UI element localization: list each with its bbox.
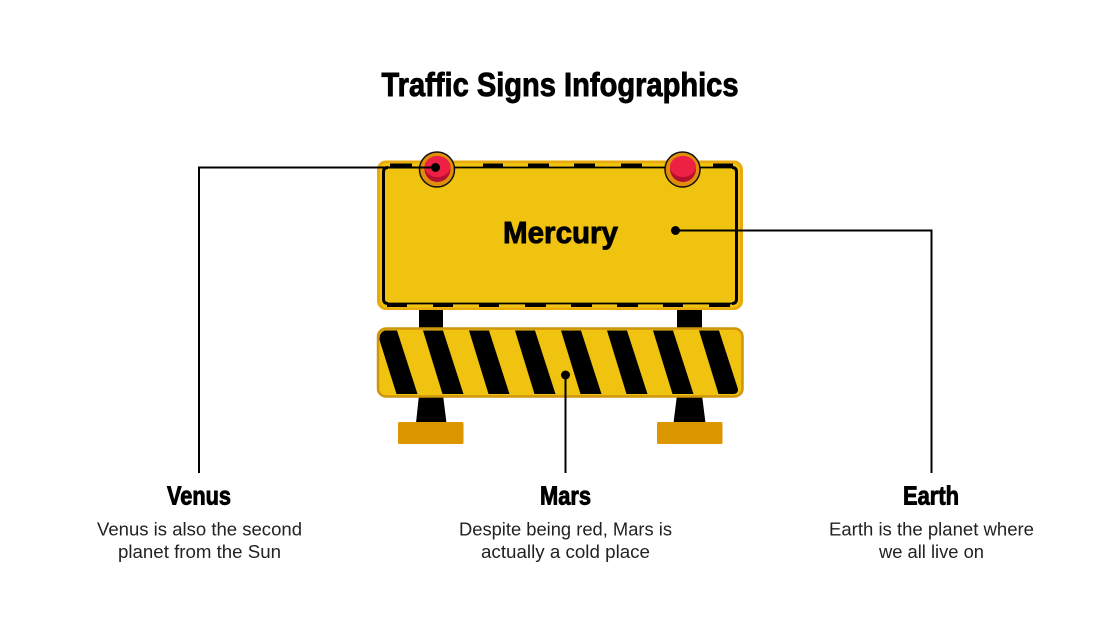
description: Earth: we all live on bbox=[878, 542, 984, 562]
description: Mars: Despite being red, Mars is bbox=[459, 520, 672, 540]
upper posts bbox=[419, 305, 702, 331]
warning light right bbox=[665, 152, 700, 187]
heading: Venus: Venus bbox=[167, 480, 231, 510]
sign label: Mercury: Mercury bbox=[503, 215, 619, 250]
connector: Mars bbox=[562, 372, 569, 473]
text block: Earth bbox=[829, 480, 1034, 562]
description: Mars: actually a cold place bbox=[481, 542, 650, 562]
text block: Mars bbox=[459, 480, 672, 562]
title: Traffic Signs Infographics bbox=[382, 67, 738, 104]
heading: Earth: Earth bbox=[903, 480, 959, 510]
warning light left bbox=[420, 152, 454, 187]
icon: road barrier sign bbox=[377, 152, 743, 444]
text block: Venus bbox=[97, 480, 302, 562]
sign board bbox=[377, 160, 743, 310]
description: Earth: Earth is the planet where bbox=[829, 520, 1034, 540]
lower legs bbox=[416, 395, 706, 423]
connector: Venus bbox=[199, 164, 439, 473]
striped barrier bbox=[378, 328, 742, 396]
connector: Earth bbox=[672, 227, 932, 473]
heading: Mars: Mars bbox=[540, 480, 591, 510]
feet bbox=[398, 422, 722, 444]
description: Venus: Venus is also the second bbox=[97, 520, 302, 540]
description: Venus: planet from the Sun bbox=[118, 542, 281, 562]
